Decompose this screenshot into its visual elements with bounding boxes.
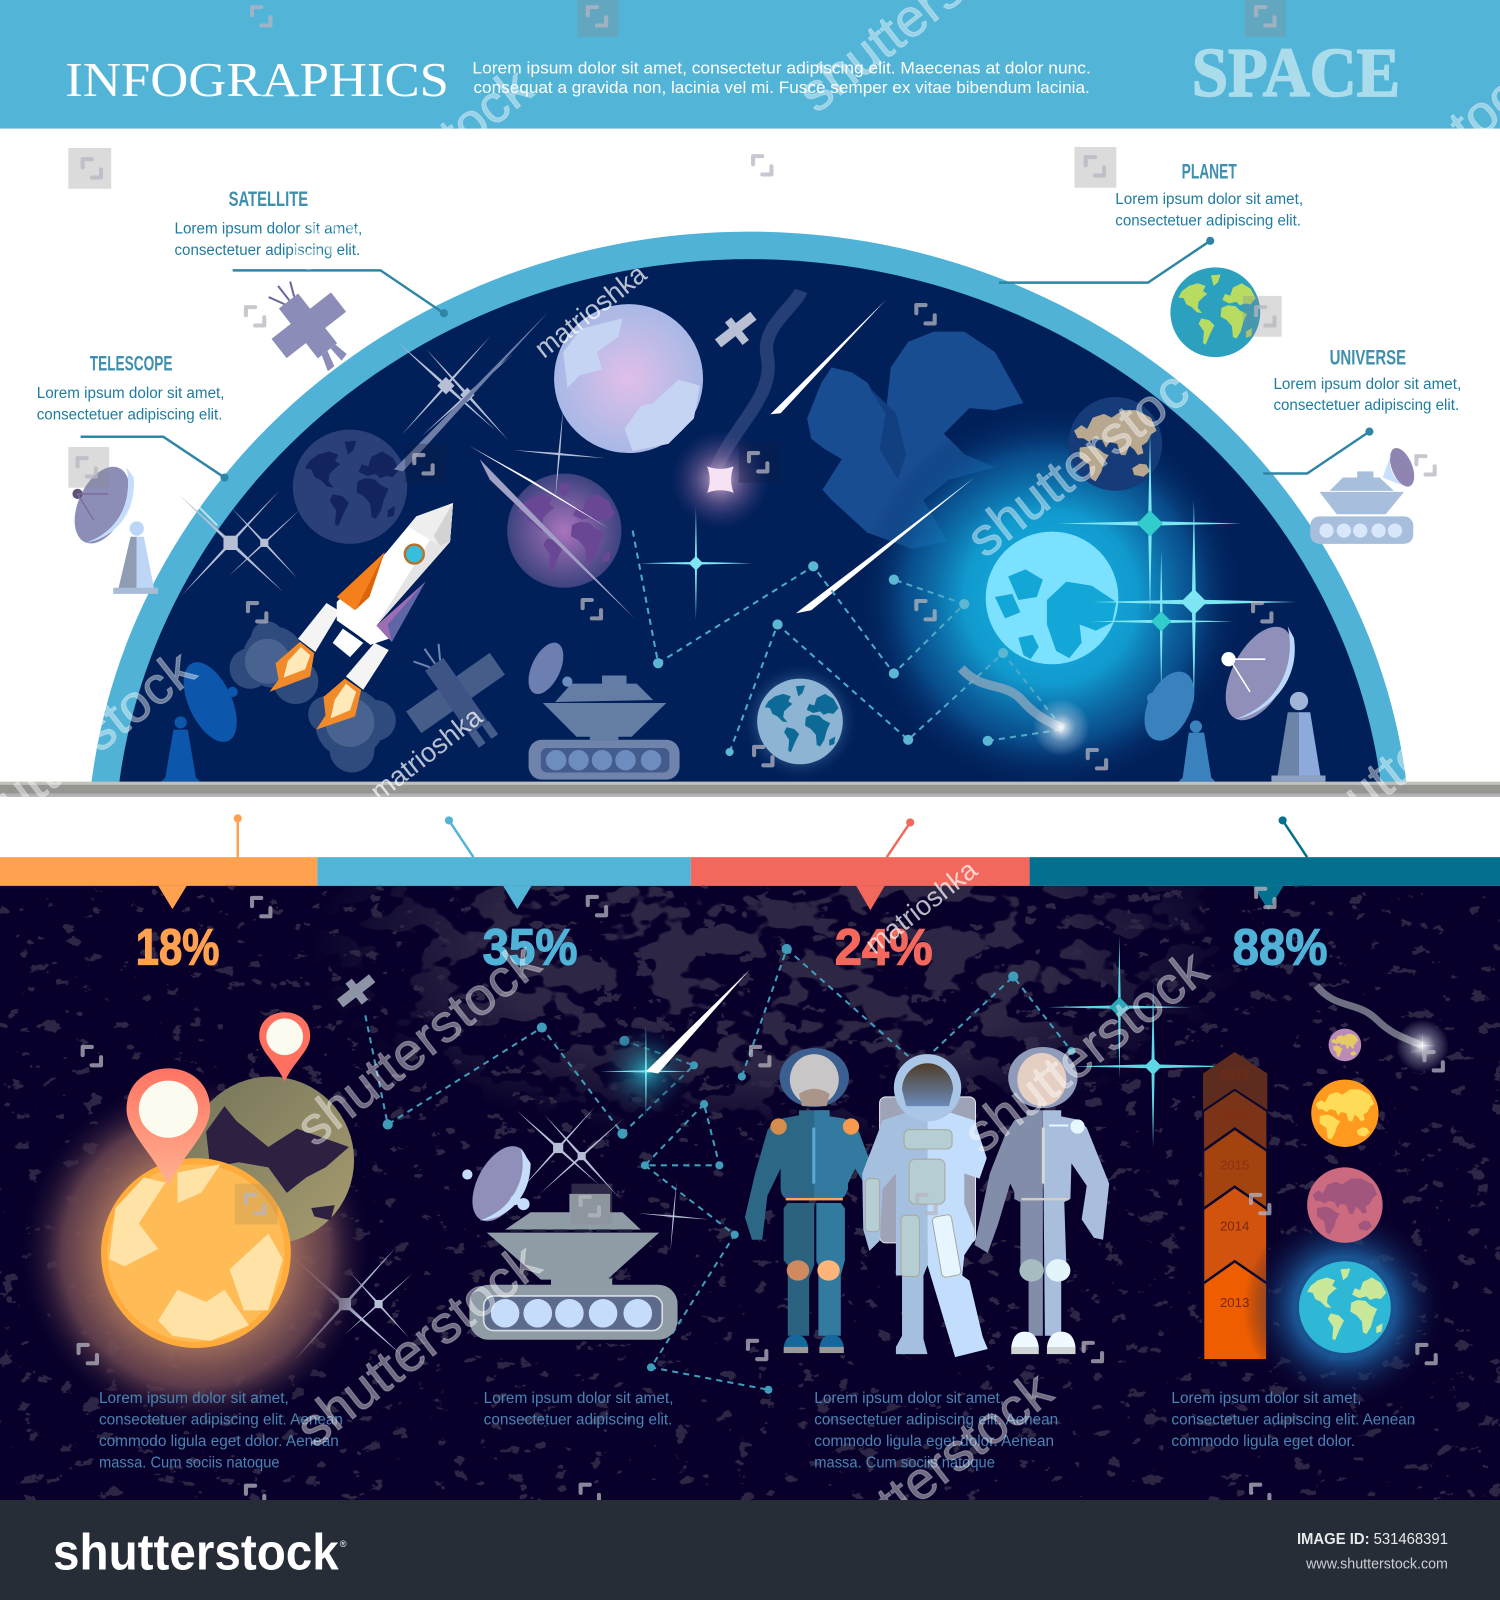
lower text: column 1: consectetuer adipiscing elit. Aenean [99, 1411, 343, 1428]
callout: planet: consectetuer adipiscing elit. [1115, 213, 1301, 230]
lower text: column 1: massa. Cum sociis natoque [99, 1454, 280, 1471]
bar pins [234, 814, 1307, 857]
satellite: small inside dome [714, 312, 756, 348]
lower text: column 2 [484, 1390, 673, 1428]
stars: grey sparkles upper [130, 292, 609, 644]
watermark text: matrioshka: matrioshka [364, 700, 488, 807]
satellite small lower [333, 969, 381, 1015]
planet: small blue globe [750, 671, 850, 772]
lower text: column 3: consectetuer adipiscing elit. Aenean [814, 1411, 1058, 1428]
rocket body [337, 503, 453, 645]
planet: earth [1299, 1261, 1391, 1353]
timeline arrow [1203, 1052, 1267, 1360]
footer bar [0, 1500, 1500, 1600]
rocket boosters [298, 603, 389, 690]
smoke clouds [230, 621, 396, 772]
boots [1011, 1332, 1039, 1347]
title: infographics: INFOGRAPHICS [65, 52, 449, 107]
percentages: 88% [1233, 918, 1328, 975]
callout: satellite: Lorem ipsum dolor sit amet, [174, 221, 362, 238]
timeline years: 2016 [1220, 1107, 1249, 1122]
rocket [269, 503, 453, 730]
planets column [1243, 1029, 1447, 1409]
watermark text: shutterstock: shutterstock [798, 1360, 1063, 1586]
lower text: column 2: Lorem ipsum dolor sit amet, [484, 1390, 673, 1407]
dish: large light [1221, 626, 1326, 782]
rover in dome [521, 637, 680, 780]
astronaut: middle [862, 1054, 988, 1357]
planet outside dome [1170, 267, 1260, 357]
lower text: column 1: commodo ligula eget dolor. Aenean [99, 1433, 339, 1450]
dish: blue right [1144, 672, 1215, 782]
timeline years: 2014 [1220, 1219, 1249, 1234]
rocket flames [269, 642, 361, 730]
constellations lower [365, 944, 1076, 1394]
lower text: column 1 [99, 1390, 343, 1471]
panel texture: fragments [0, 886, 1500, 1500]
callout: telescope: Lorem ipsum dolor sit amet, [37, 385, 224, 402]
comet: pink [671, 291, 801, 529]
shooting stars [394, 300, 974, 618]
planet: orange [101, 1158, 291, 1348]
callout: planet: PLANET [1182, 160, 1237, 184]
percentages: 24% [835, 918, 933, 975]
timeline years: 2017 [1220, 1068, 1249, 1083]
footer logo: shutterstock [53, 1523, 339, 1580]
callout: telescope: TELESCOPE [90, 351, 172, 375]
title: space: SPACE [1192, 35, 1400, 112]
planet: rose [1307, 1167, 1383, 1243]
stars: cyan sparkles [640, 432, 1296, 704]
callout: planet: Lorem ipsum dolor sit amet, [1115, 191, 1303, 208]
lower text: column 3: commodo ligula eget dolor. Aenean [814, 1433, 1054, 1450]
base bar [0, 782, 1500, 797]
timeline years: 2015 [1220, 1157, 1249, 1172]
rocket fins [337, 552, 385, 610]
watermark text: shutterstock: shutterstock [956, 343, 1222, 569]
lower text: column 4: Lorem ipsum dolor sit amet, [1171, 1390, 1361, 1407]
percentages: 18% [136, 918, 219, 975]
footer logo: ® [340, 1539, 347, 1549]
planet: purple globe [507, 473, 621, 588]
callout: universe: consectetuer adipiscing elit. [1273, 397, 1459, 414]
pin: large [127, 1068, 210, 1186]
bar pointers [158, 886, 1284, 910]
suit [745, 1110, 874, 1240]
astronaut: left [745, 1048, 874, 1353]
callout: satellite [174, 187, 362, 259]
callout: telescope [37, 351, 224, 423]
big blue continents [807, 332, 1023, 549]
watermark text: shutterstock: shutterstock [285, 932, 551, 1157]
rover: universe [1310, 445, 1419, 544]
comet: white [961, 668, 1090, 756]
pin: small [259, 1012, 310, 1082]
satellite: outside dome [248, 263, 368, 386]
dome night sky [119, 259, 1381, 782]
constellation lines [633, 531, 1061, 756]
boots [784, 1335, 808, 1347]
footer image id: IMAGE ID: 531468391 [1297, 1531, 1448, 1548]
callout: universe [1273, 345, 1461, 414]
planet: earth glow [1243, 1205, 1447, 1409]
rover lower [461, 1137, 678, 1340]
watermark text: shutterstock: shutterstock [277, 57, 543, 283]
suit left [974, 1110, 1043, 1336]
lower text: column 1: Lorem ipsum dolor sit amet, [99, 1390, 289, 1407]
planet: mini purple [1329, 1029, 1361, 1061]
watermark text: matrioshka: matrioshka [859, 853, 983, 960]
percentages: 35% [483, 918, 578, 975]
lower text: column 4: consectetuer adipiscing elit. Aenean [1171, 1411, 1415, 1428]
callout: satellite: SATELLITE [229, 187, 308, 211]
colour bar [0, 857, 1500, 886]
globes with pins [17, 1012, 374, 1432]
watermark text: matrioshka: matrioshka [528, 257, 653, 364]
planet: tan globe [1068, 397, 1162, 491]
header paragraph: consequat a gravida non, lacinia vel mi. Fusce semper ex vitae bibendum lacinia. [473, 79, 1090, 97]
suit left half [862, 1112, 928, 1354]
timeline years [1220, 1068, 1249, 1310]
callout: planet [1115, 160, 1303, 230]
lower text: column 4 [1171, 1390, 1415, 1450]
lower text: column 3: Lorem ipsum dolor sit amet, [814, 1390, 1004, 1407]
lower dark panel [0, 886, 1500, 1500]
callout: satellite: consectetuer adipiscing elit. [174, 242, 360, 259]
percentages [136, 918, 1328, 975]
telescope: outside dome [64, 458, 158, 594]
callout: universe: UNIVERSE [1330, 345, 1406, 369]
details [1042, 1128, 1045, 1184]
lower text: column 3: massa. Cum sociis natoque [814, 1454, 995, 1471]
leader dots [220, 237, 1373, 482]
comet lower [1316, 986, 1449, 1072]
dome panel: space scene [92, 232, 1406, 782]
lower text: column 4: commodo ligula eget dolor. [1171, 1433, 1355, 1450]
stars lower [237, 1069, 712, 1412]
leader lines [81, 241, 1369, 478]
blue glow [878, 424, 1225, 772]
helmet [1008, 1047, 1078, 1108]
dome ring [92, 232, 1406, 782]
watermark text: matrioshka [364, 257, 983, 960]
backpack [880, 1097, 976, 1243]
rocket window [404, 543, 425, 565]
lower text: column 2: consectetuer adipiscing elit. [484, 1411, 672, 1428]
helmet [780, 1048, 849, 1107]
watermark text: shutterstock: shutterstock [285, 1233, 551, 1458]
ring tick [199, 507, 217, 526]
chest and leg panels [865, 1130, 961, 1278]
lower text: column 3 [814, 1390, 1058, 1471]
astronaut: right [974, 1047, 1109, 1354]
planet: dark globe [293, 430, 407, 544]
watermark text: shutterstock: shutterstock [953, 939, 1219, 1165]
trim and knees [812, 1128, 815, 1184]
header banner [0, 0, 1500, 129]
planet: orange [1311, 1080, 1379, 1147]
dish: blue left [162, 662, 238, 782]
header paragraph: Lorem ipsum dolor sit amet, consectetur adipiscing elit. Maecenas at dolor nunc. [472, 59, 1091, 77]
suit right half [928, 1112, 988, 1357]
callout: universe: Lorem ipsum dolor sit amet, [1273, 376, 1461, 393]
suit right [1043, 1110, 1109, 1336]
helmet [894, 1054, 961, 1121]
footer url: www.shutterstock.com [1305, 1556, 1448, 1572]
timeline years: 2013 [1220, 1295, 1249, 1310]
legs [784, 1203, 814, 1336]
sun glow [17, 1074, 374, 1432]
satellite: dark inside dome [406, 644, 505, 748]
callout: telescope: consectetuer adipiscing elit. [37, 406, 222, 423]
stars cyan lower [1048, 936, 1235, 1148]
planet: cyan globe [986, 532, 1118, 664]
planet: lavender globe [554, 304, 703, 453]
header paragraph [472, 59, 1091, 97]
star glow with meteor [597, 969, 750, 1120]
planet: olive [187, 1077, 354, 1244]
